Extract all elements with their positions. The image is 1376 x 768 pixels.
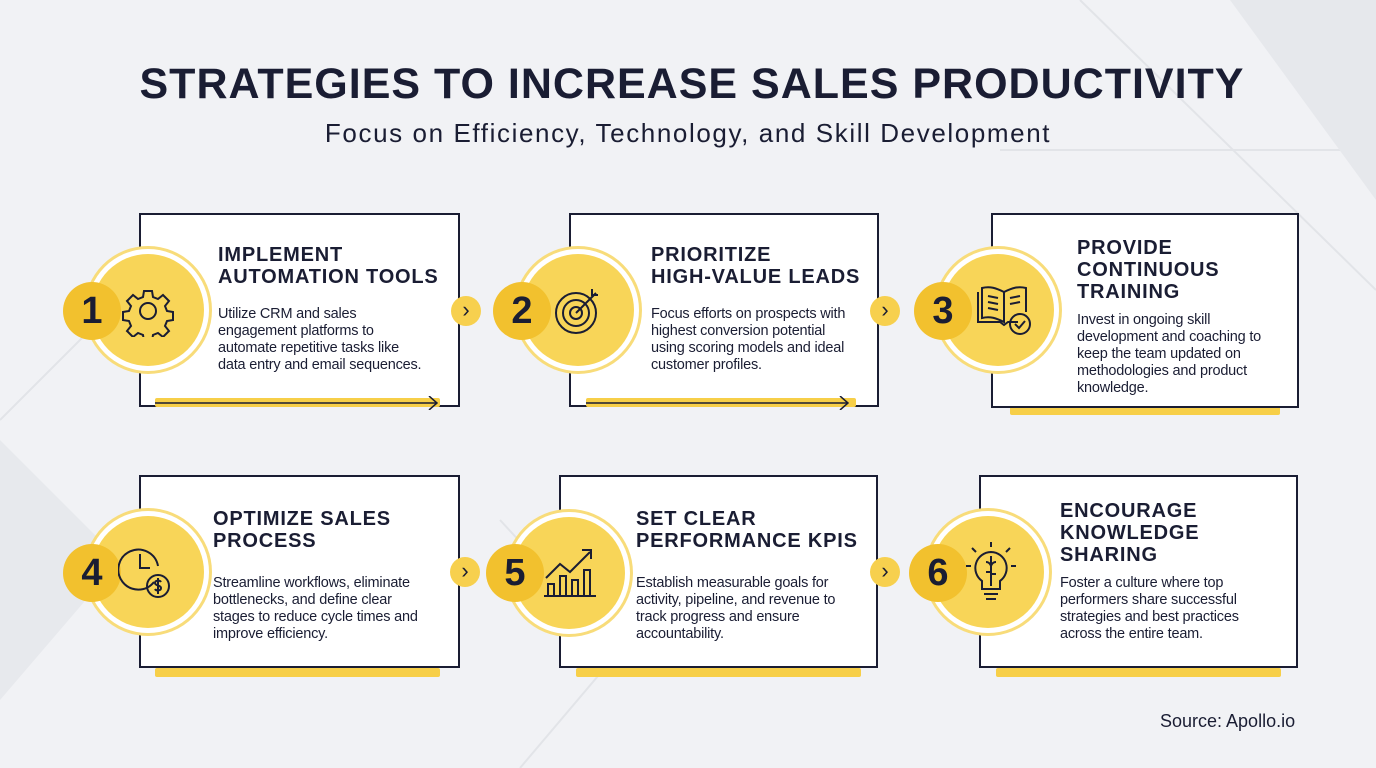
title: STRATEGIES TO INCREASE SALES PRODUCTIVITY [140, 60, 1244, 108]
card 5: 5 [504, 552, 526, 594]
card 3: knowledge. [1077, 380, 1148, 396]
card 2: customer profiles. [651, 357, 762, 373]
card 6: SHARING [1060, 544, 1158, 566]
card 6: ENCOURAGE [1060, 500, 1197, 522]
card 4 [63, 475, 460, 677]
card 4: bottlenecks, and define clear [213, 592, 392, 608]
card 2: using scoring models and ideal [651, 340, 844, 356]
card 6: 6 [927, 552, 949, 594]
card 4: improve efficiency. [213, 626, 328, 642]
card 4: PROCESS [213, 530, 316, 552]
card 2: PRIORITIZE [651, 244, 771, 266]
card 3: 3 [932, 290, 954, 332]
card 4: Streamline workflows, eliminate [213, 575, 410, 591]
chevron 4 [450, 557, 480, 587]
card 3: PROVIDE [1077, 237, 1173, 259]
card 1: IMPLEMENT [218, 244, 343, 266]
source: Source: Apollo.io [1160, 711, 1295, 731]
card 5: accountability. [636, 626, 724, 642]
card 6: KNOWLEDGE [1060, 522, 1199, 544]
card 5: Establish measurable goals for [636, 575, 828, 591]
icon: clock with dollar [118, 548, 170, 598]
card 4: 4 [81, 552, 103, 594]
card 2: 2 [511, 290, 533, 332]
card 4: OPTIMIZE SALES [213, 508, 391, 530]
card 1: 1 [81, 290, 103, 332]
card 5: SET CLEAR [636, 508, 757, 530]
card 6: Foster a culture where top [1060, 575, 1223, 591]
card 6: strategies and best practices [1060, 609, 1239, 625]
card 6: across the entire team. [1060, 626, 1203, 642]
card 1: automate repetitive tasks like [218, 340, 399, 356]
chevron 1 [451, 296, 481, 326]
card 1: data entry and email sequences. [218, 357, 421, 373]
card 3 [914, 213, 1299, 415]
card 1 [63, 213, 460, 410]
card 5: activity, pipeline, and revenue to [636, 592, 835, 608]
card 1: engagement platforms to [218, 323, 374, 339]
card 6: performers share successful [1060, 592, 1237, 608]
icon: growth chart [544, 549, 596, 597]
card 2: highest conversion potential [651, 323, 825, 339]
card 1: Utilize CRM and sales [218, 306, 356, 322]
subtitle: Focus on Efficiency, Technology, and Skill Development [325, 118, 1051, 148]
chevron 2: › [881, 297, 889, 322]
card 4: stages to reduce cycle times and [213, 609, 418, 625]
card 2 [493, 213, 879, 410]
card 5: track progress and ensure [636, 609, 799, 625]
card 1: AUTOMATION TOOLS [218, 266, 439, 288]
card 3: CONTINUOUS [1077, 259, 1219, 281]
card 6 [909, 475, 1298, 677]
icon: book with check [977, 286, 1031, 335]
icon: target [555, 289, 598, 334]
chevron 5 [870, 557, 900, 587]
icon: lightbulb brain [966, 542, 1016, 600]
chevron 1: › [462, 297, 470, 322]
card 2: HIGH-VALUE LEADS [651, 266, 860, 288]
card 3: Invest in ongoing skill [1077, 312, 1210, 328]
chevron 4: › [461, 558, 469, 583]
icon: gear [122, 290, 174, 337]
card 5: PERFORMANCE KPIS [636, 530, 858, 552]
card 3: development and coaching to [1077, 329, 1261, 345]
card 3: TRAINING [1077, 281, 1180, 303]
card 3: methodologies and product [1077, 363, 1247, 379]
card 3: keep the team updated on [1077, 346, 1241, 362]
chevron 2 [870, 296, 900, 326]
chevron 5: › [881, 558, 889, 583]
card 5 [486, 475, 878, 677]
card 2: Focus efforts on prospects with [651, 306, 845, 322]
